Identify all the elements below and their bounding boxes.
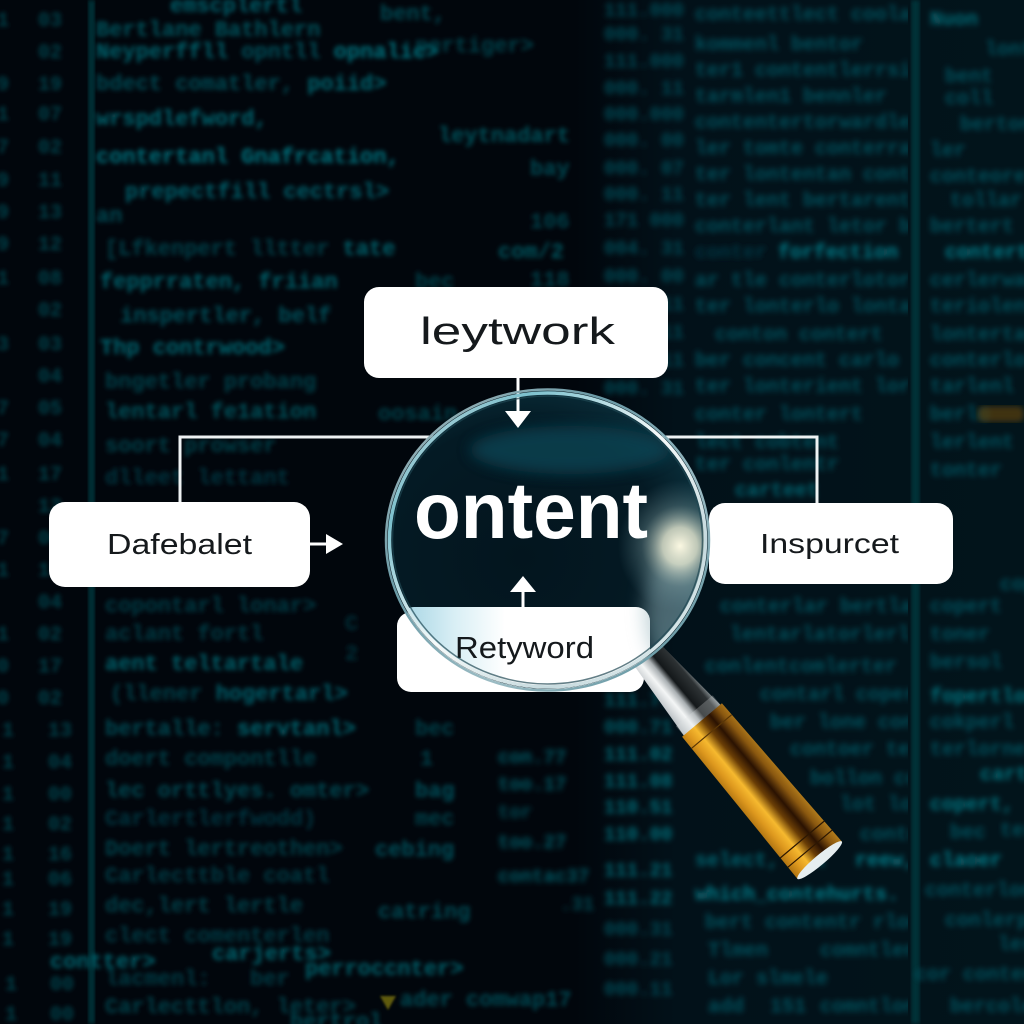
right code column bbox=[692, 3, 908, 1015]
left line numbers: 12 bbox=[38, 234, 62, 257]
left line numbers: 13 bbox=[48, 720, 72, 743]
left code column: bec bbox=[415, 717, 455, 742]
left line numbers: 16 bbox=[48, 844, 72, 867]
numeric column: 111.77 bbox=[604, 690, 672, 712]
left code column: forter lentol bbox=[105, 502, 277, 527]
left line numbers: 06 bbox=[48, 869, 72, 892]
numeric column: too.17 bbox=[498, 774, 566, 796]
left code column: 106 bbox=[530, 210, 570, 235]
left line numbers: 11 bbox=[38, 560, 62, 583]
far right code column: copert bbox=[930, 596, 1002, 619]
left code column: oosain bbox=[378, 402, 457, 427]
right code column: contert bbox=[860, 824, 944, 847]
arrow: bottom box up into lens bbox=[510, 576, 536, 607]
left code column: doert compontlle bbox=[105, 747, 316, 772]
left code column: catring bbox=[378, 900, 470, 925]
right code column: bert contentr rlon bbox=[705, 912, 921, 935]
right code column: ter lonterlo lontar bbox=[695, 296, 923, 319]
far right code column: bertert bbox=[930, 216, 1014, 239]
far right code column: tarlenl bbox=[930, 376, 1014, 399]
numeric column: 000. 11 bbox=[604, 78, 684, 100]
left line numbers: 1 bbox=[2, 784, 14, 807]
right code column: ar tle conterlotor bbox=[695, 270, 911, 293]
left line numbers: 02 bbox=[38, 624, 62, 647]
box: leytwork bbox=[364, 287, 668, 378]
left code column: Carlecttble coatl bbox=[105, 864, 329, 889]
box: Retyword back plate bbox=[397, 612, 644, 692]
left line numbers: 11 bbox=[38, 170, 62, 193]
numeric column: contac37 bbox=[498, 866, 589, 888]
left code column: aclant fortl bbox=[105, 622, 263, 647]
left code column: lec orttlyes. omter> bbox=[105, 779, 369, 804]
left line numbers: 1 bbox=[2, 720, 14, 743]
left code column: wrspdlefword, bbox=[96, 107, 268, 132]
left code column: Neyperffll opntll opnalic> bbox=[96, 40, 439, 65]
right code column: comntlenlant bbox=[820, 940, 964, 963]
arrow: left box to lens bbox=[310, 534, 343, 554]
numeric column bbox=[498, 0, 684, 1001]
left line numbers: 13 bbox=[38, 202, 62, 225]
right code column: select, frt bbox=[695, 850, 827, 873]
magnifying lens bbox=[386, 378, 742, 697]
left line numbers: 02 bbox=[38, 42, 62, 65]
box: leytwork: leytwork bbox=[420, 311, 616, 353]
right code column: ter conlentr bbox=[695, 454, 839, 477]
left code column: conterl fotar bbox=[105, 567, 277, 592]
right code column: contoer tert bbox=[790, 739, 934, 762]
box: Inspurcet: Inspurcet bbox=[760, 528, 899, 559]
left code column: bag bbox=[415, 779, 455, 804]
handle neck bbox=[629, 639, 722, 738]
numeric column: too.27 bbox=[498, 832, 566, 854]
left line numbers: 07 bbox=[38, 104, 62, 127]
numeric column: 000.71 bbox=[604, 717, 672, 739]
numeric column: 000.111 bbox=[604, 350, 684, 372]
left code column: aent teltartale bbox=[105, 652, 303, 677]
left code column: lacmenl: bbox=[105, 967, 211, 992]
right code column: ter1 contentlerrsier bbox=[695, 60, 935, 83]
connector: left box to lens bbox=[180, 437, 440, 502]
right code column: add bbox=[708, 996, 744, 1019]
numeric column: con.77 bbox=[498, 747, 566, 769]
right code column: comntlonl bbox=[820, 996, 928, 1019]
numeric column: 110.51 bbox=[604, 797, 672, 819]
left line numbers: 1 bbox=[2, 929, 14, 952]
left line numbers: 12 bbox=[38, 496, 62, 519]
left line numbers: 1 bbox=[2, 869, 14, 892]
left code column: Thp contrwood> bbox=[100, 336, 285, 361]
left code column: bertalle: servtanl> bbox=[105, 717, 356, 742]
lens right shine bbox=[634, 559, 702, 654]
left line numbers: 1 bbox=[2, 899, 14, 922]
left line numbers: 1 bbox=[2, 844, 14, 867]
left code column: bec bbox=[415, 270, 455, 295]
left code column: bertter bbox=[105, 537, 197, 562]
numeric column: 000. 11 bbox=[604, 322, 684, 344]
lens rim bbox=[386, 390, 709, 690]
left code column: contter> bbox=[50, 950, 156, 975]
left code column: bent, bbox=[380, 2, 446, 27]
left line numbers: 04 bbox=[38, 366, 62, 389]
right code column: reew, bbox=[855, 850, 915, 873]
left line numbers: 04 bbox=[48, 752, 72, 775]
left line numbers: 00 bbox=[50, 974, 74, 997]
left code column: cebing bbox=[375, 838, 454, 863]
numeric column: .31 bbox=[560, 894, 594, 916]
numeric column: 000.111 bbox=[604, 294, 684, 316]
left line numbers bbox=[0, 10, 74, 1024]
numeric column: 111.21 bbox=[604, 860, 672, 882]
connector: right box to lens bbox=[660, 437, 817, 503]
right code column: forfection bbox=[778, 242, 898, 265]
left code column: soort prowser bbox=[105, 434, 277, 459]
left line numbers: 19 bbox=[48, 929, 72, 952]
far right code column: claoer bbox=[930, 850, 1002, 873]
numeric column: 000. 11 bbox=[604, 184, 684, 206]
far right code column: ler bbox=[930, 140, 966, 163]
left code column: bdect comatler, poiid> bbox=[96, 72, 386, 97]
left line numbers: 02 bbox=[38, 300, 62, 323]
left code column: prepectfill cectrsl> bbox=[125, 180, 389, 205]
numeric column: 000. 00 bbox=[604, 130, 684, 152]
far right code column: bent bbox=[945, 66, 993, 89]
right code column: kommenl bentor bbox=[695, 34, 863, 57]
numeric column: tor bbox=[498, 802, 532, 824]
left code column: dec,lert lertle bbox=[105, 894, 303, 919]
numeric column: 000.31 bbox=[604, 919, 672, 941]
left line numbers: 1 bbox=[2, 752, 14, 775]
numeric column: 111.000 bbox=[604, 51, 684, 73]
left line numbers: 1 bbox=[5, 974, 17, 997]
numeric column: 000. 07 bbox=[604, 158, 684, 180]
left line numbers: 00 bbox=[48, 784, 72, 807]
left code column: inspertler, belf bbox=[120, 304, 331, 329]
left line numbers: 04 bbox=[38, 592, 62, 615]
far right code column: copert, bbox=[930, 794, 1014, 817]
far right code column: bersol bbox=[930, 652, 1002, 675]
left code column: ader comwap17 bbox=[400, 988, 572, 1013]
far right code column: coll bbox=[945, 88, 993, 111]
right code column: ber lone conterlon bbox=[770, 712, 986, 735]
box: Inspurcet bbox=[709, 503, 953, 584]
left code column: 2 bbox=[345, 642, 358, 667]
left code column: lentarl fe1ation bbox=[105, 400, 316, 425]
numeric column: 004. 31 bbox=[604, 238, 684, 260]
right code column: ter lonterient lorter bbox=[695, 376, 947, 399]
right code column: lect cobtent bbox=[695, 432, 839, 455]
left line numbers: 02 bbox=[48, 814, 72, 837]
right code column: conterlant letor ber bbox=[695, 216, 935, 239]
left code column: bay bbox=[530, 157, 570, 182]
right code column: conter bbox=[695, 242, 767, 265]
left code column: an bbox=[96, 204, 122, 229]
left line numbers: 17 bbox=[38, 656, 62, 679]
left line numbers: 04 bbox=[38, 430, 62, 453]
left code column: fepprraten, friian bbox=[100, 270, 338, 295]
left code column: 118 bbox=[530, 268, 570, 293]
left line numbers: 1 bbox=[2, 814, 14, 837]
box: Dafebalet bbox=[49, 502, 310, 587]
right code column: ter lent bertarent bbox=[695, 190, 911, 213]
left code column bbox=[50, 0, 572, 1024]
left code column: perroccnter> bbox=[305, 957, 463, 982]
far right code column: berlo bbox=[930, 404, 990, 427]
numeric column: 111.22 bbox=[604, 888, 672, 910]
lens word: ontent: ontent bbox=[414, 466, 648, 555]
far right code column: tonter bbox=[930, 460, 1002, 483]
right code column: lot lont bbox=[840, 794, 936, 817]
right code column: Tlmen bbox=[708, 940, 768, 963]
left code column: Doert lertreothen> bbox=[105, 837, 343, 862]
numeric column: 111.08 bbox=[604, 771, 672, 793]
numeric column: 000.11 bbox=[604, 979, 672, 1001]
box: Dafebalet: Dafebalet bbox=[107, 529, 252, 561]
left line numbers: 17 bbox=[38, 464, 62, 487]
right code column: ler tomte conterrat bbox=[695, 138, 923, 161]
right code column: conter lontert bbox=[695, 404, 863, 427]
box: Retyword inside lens bbox=[409, 607, 650, 686]
numeric column: 000. 31 bbox=[604, 378, 684, 400]
left code column: carjerts> bbox=[212, 942, 331, 967]
right code column: Lor slmele bbox=[708, 968, 828, 991]
left code column: copontarl lonar> bbox=[105, 594, 316, 619]
far right code column: cokperl bbox=[930, 712, 1014, 735]
numeric column: 110.00 bbox=[604, 824, 672, 846]
left code column: pertiger> bbox=[415, 34, 534, 59]
left code column: ber bbox=[250, 967, 290, 992]
right code column: conteettlect coolare bbox=[695, 4, 935, 27]
left code column: Carlecttlon, leter> bbox=[105, 995, 356, 1020]
numeric column: 111.02 bbox=[604, 744, 672, 766]
left line numbers: 05 bbox=[38, 398, 62, 421]
far right code column: bec bbox=[950, 822, 986, 845]
numeric column: 000.000 bbox=[604, 104, 684, 126]
left code column: clect comenterlen bbox=[105, 924, 329, 949]
right code column: ter lontentan conter bbox=[695, 164, 935, 187]
right code column: conlentcomlerter bbox=[705, 656, 897, 679]
left code column: leytnadart bbox=[438, 124, 570, 149]
right code column: conton contert bbox=[715, 324, 883, 347]
right code column: 151 bbox=[770, 996, 806, 1019]
left line numbers: 19 bbox=[38, 74, 62, 97]
accent glows bbox=[380, 406, 1024, 1010]
arrow: top box into lens bbox=[505, 378, 531, 428]
left code column: dlleet lettant bbox=[105, 466, 290, 491]
far right code column: Nuon bbox=[930, 9, 978, 32]
right code column: bollon conter bbox=[810, 768, 966, 791]
numeric column: 171 000 bbox=[604, 210, 684, 232]
left code column: [Lfkenpert lltter tate bbox=[105, 237, 395, 262]
right code column: conterlar bertlan bbox=[720, 596, 924, 619]
left code column: com/2 bbox=[498, 240, 564, 265]
right code column: contarl coperfiled bbox=[760, 684, 976, 707]
right code column: which_contehurts. bbox=[695, 884, 899, 907]
left code column: (llener hogertarl> bbox=[110, 682, 348, 707]
far right code column: lerlent bbox=[930, 432, 1014, 455]
right code column: contentertorwardlen bbox=[695, 112, 923, 135]
numeric column: 000. 31 bbox=[604, 24, 684, 46]
box: Retyword inside lens: Retyword bbox=[455, 630, 594, 665]
left line numbers: 02 bbox=[38, 688, 62, 711]
left code column: 1 bbox=[420, 747, 433, 772]
gold grip bbox=[680, 701, 845, 883]
right code column: tarmlen1 bennler bbox=[695, 86, 887, 109]
left code column: contertanl Gnafrcation, bbox=[96, 145, 400, 170]
far right code column: toner bbox=[930, 624, 990, 647]
left code column: C bbox=[345, 612, 358, 637]
right code column: ber concent carlo bbox=[695, 350, 899, 373]
left code column: Bertlane Bathlern bbox=[96, 18, 320, 43]
numeric column: 111.000 bbox=[604, 0, 684, 22]
left line numbers: 03 bbox=[38, 334, 62, 357]
left line numbers: 08 bbox=[38, 268, 62, 291]
numeric column: 000. 00 bbox=[604, 266, 684, 288]
lens top teal band bbox=[470, 426, 670, 474]
left line numbers: 02 bbox=[38, 137, 62, 160]
right code column: lentarlatorlerl bbox=[730, 624, 910, 647]
right code column: carteet bbox=[735, 480, 819, 503]
left line numbers: 19 bbox=[48, 899, 72, 922]
left line numbers: 03 bbox=[38, 10, 62, 33]
left code column: mec bbox=[415, 807, 455, 832]
far right code column bbox=[915, 9, 1024, 1019]
far right code column: tollar bbox=[950, 190, 1022, 213]
left code column: Carlertlerfwodd) bbox=[105, 807, 316, 832]
numeric column: 000.21 bbox=[604, 949, 672, 971]
left line numbers: 06 bbox=[38, 528, 62, 551]
magnifier handle bbox=[625, 636, 845, 883]
left code column: bngetler probang bbox=[105, 370, 316, 395]
